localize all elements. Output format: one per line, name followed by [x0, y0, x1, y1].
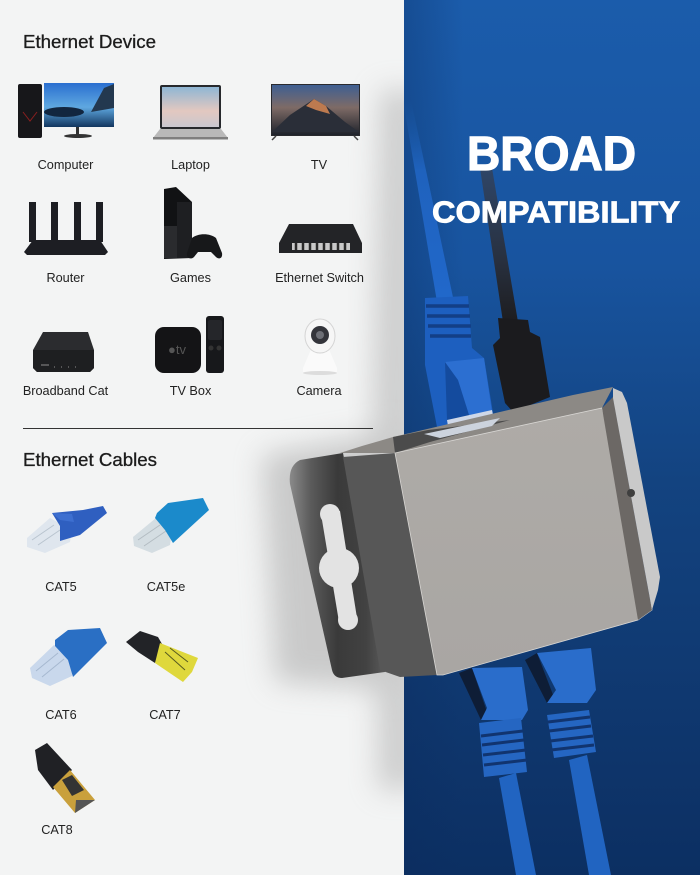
label: CAT5e	[147, 580, 185, 594]
icon: TV box	[155, 316, 224, 373]
device shadow on light panel	[262, 90, 420, 790]
icon: computer	[18, 83, 114, 138]
heading: Ethernet Cables: Ethernet Cables	[23, 450, 157, 470]
icon: CAT7 connector	[126, 631, 198, 682]
keyhole slot	[319, 504, 359, 630]
black plug: power	[493, 318, 550, 412]
label: CAT5	[45, 580, 77, 594]
bottom cable: left	[499, 773, 536, 875]
blue plug: bottom right	[525, 648, 596, 758]
icon: ethernet switch	[279, 224, 362, 253]
panel: blue background	[404, 0, 700, 875]
panel: light background	[0, 0, 404, 875]
box side: left	[343, 453, 437, 677]
box side: right	[602, 397, 652, 620]
label: CAT7	[149, 708, 181, 722]
icon: router	[24, 202, 108, 255]
label: Computer	[38, 158, 94, 172]
label: Games	[170, 271, 211, 285]
title: BROAD: BROAD	[467, 128, 636, 181]
notch: right flange	[627, 489, 635, 497]
icon: camera	[303, 319, 337, 375]
label: TV	[311, 158, 328, 172]
icon: CAT8 connector	[35, 743, 95, 813]
icon: TV	[271, 84, 360, 140]
box top edge	[340, 387, 613, 453]
label: Laptop	[171, 158, 210, 172]
label: Broadband Cat	[23, 384, 109, 398]
bottom cable: right	[569, 755, 611, 875]
icon: CAT6 connector	[30, 628, 107, 686]
label: TV Box	[170, 384, 212, 398]
icon: broadband cat	[33, 332, 94, 372]
port	[424, 418, 500, 438]
label: Camera	[296, 384, 343, 398]
title: COMPATIBILITY: COMPATIBILITY	[432, 194, 680, 230]
heading: Ethernet Device: Ethernet Device	[23, 32, 156, 52]
icon: TV box: ●tv	[168, 342, 186, 357]
device: gigabit splitter box	[290, 387, 660, 678]
icon: laptop	[153, 85, 228, 140]
label: CAT8	[41, 823, 73, 837]
icon: game console	[164, 187, 222, 259]
mounting flange: left	[290, 453, 385, 678]
cable: top black	[480, 168, 518, 322]
blue plug: top	[425, 296, 494, 432]
blue plug: bottom left	[459, 667, 528, 777]
icon: CAT5 connector	[27, 506, 107, 553]
label: Ethernet Switch	[275, 271, 364, 285]
cable: top blue	[403, 100, 454, 302]
divider line	[23, 428, 373, 429]
box front face	[395, 408, 652, 675]
icon: CAT5e connector	[133, 498, 209, 553]
label: Router	[46, 271, 85, 285]
label: CAT6	[45, 708, 77, 722]
mounting flange: right	[613, 388, 660, 610]
